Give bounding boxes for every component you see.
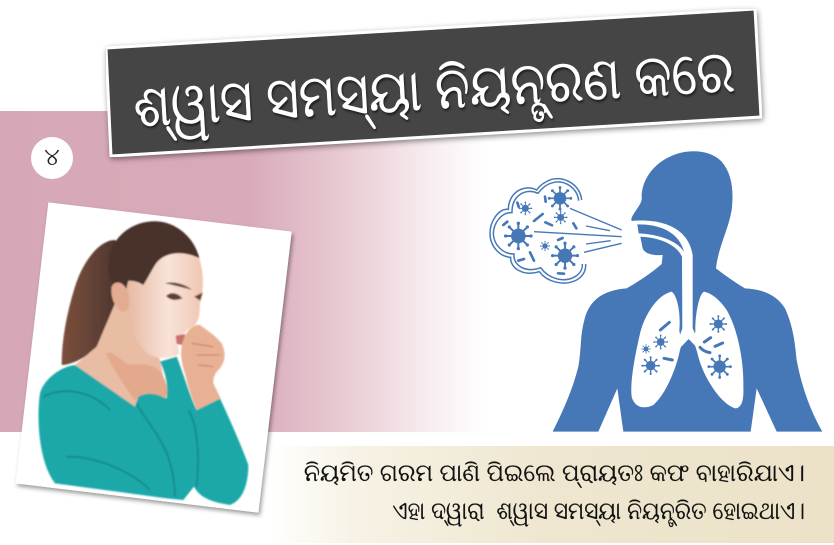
respiratory illustration bbox=[489, 151, 822, 432]
right lung bbox=[691, 292, 743, 408]
woman bbox=[38, 221, 248, 505]
title banner bbox=[103, 7, 767, 163]
neck and chest bbox=[75, 303, 167, 408]
title banner: ଶ୍ୱାସ ସମସ୍ୟା ନିୟନ୍ତ୍ରଣ କରେ bbox=[132, 38, 736, 140]
caption text: ନିୟମିତ ଗରମ ପାଣି ପିଇଲେ ପ୍ରାୟତଃ କଫ ବାହାରିଯାଏ। bbox=[304, 459, 805, 487]
photo frame bbox=[16, 202, 292, 513]
lung germs bbox=[641, 315, 732, 379]
airway and trachea bbox=[632, 221, 697, 347]
teal sweater bbox=[38, 357, 248, 505]
pink gradient band bbox=[0, 111, 500, 432]
ear bbox=[111, 282, 129, 312]
ponytail bbox=[62, 240, 134, 365]
sweater folds bbox=[43, 391, 198, 497]
number badge: ୪ bbox=[44, 144, 60, 171]
caption text: ଏହା ଦ୍ୱାରା ଶ୍ୱାସ ସମସ୍ୟା ନିୟନ୍ତ୍ରିତ ହୋଇଥାଏ। bbox=[392, 497, 805, 525]
caption text bbox=[304, 459, 805, 528]
cream caption band bbox=[270, 446, 834, 543]
body silhouette bbox=[553, 151, 822, 432]
hand on throat bbox=[106, 352, 167, 401]
eyes and lips bbox=[166, 283, 202, 300]
left lung bbox=[631, 292, 686, 407]
exhaled cloud bbox=[490, 179, 586, 283]
photo: woman coughing bbox=[15, 202, 296, 518]
forearm and fist bbox=[181, 325, 225, 410]
tongue bbox=[637, 224, 684, 252]
breath lines bbox=[534, 208, 622, 252]
face bbox=[126, 252, 203, 358]
hair top bbox=[108, 221, 199, 287]
number badge bbox=[31, 137, 73, 179]
